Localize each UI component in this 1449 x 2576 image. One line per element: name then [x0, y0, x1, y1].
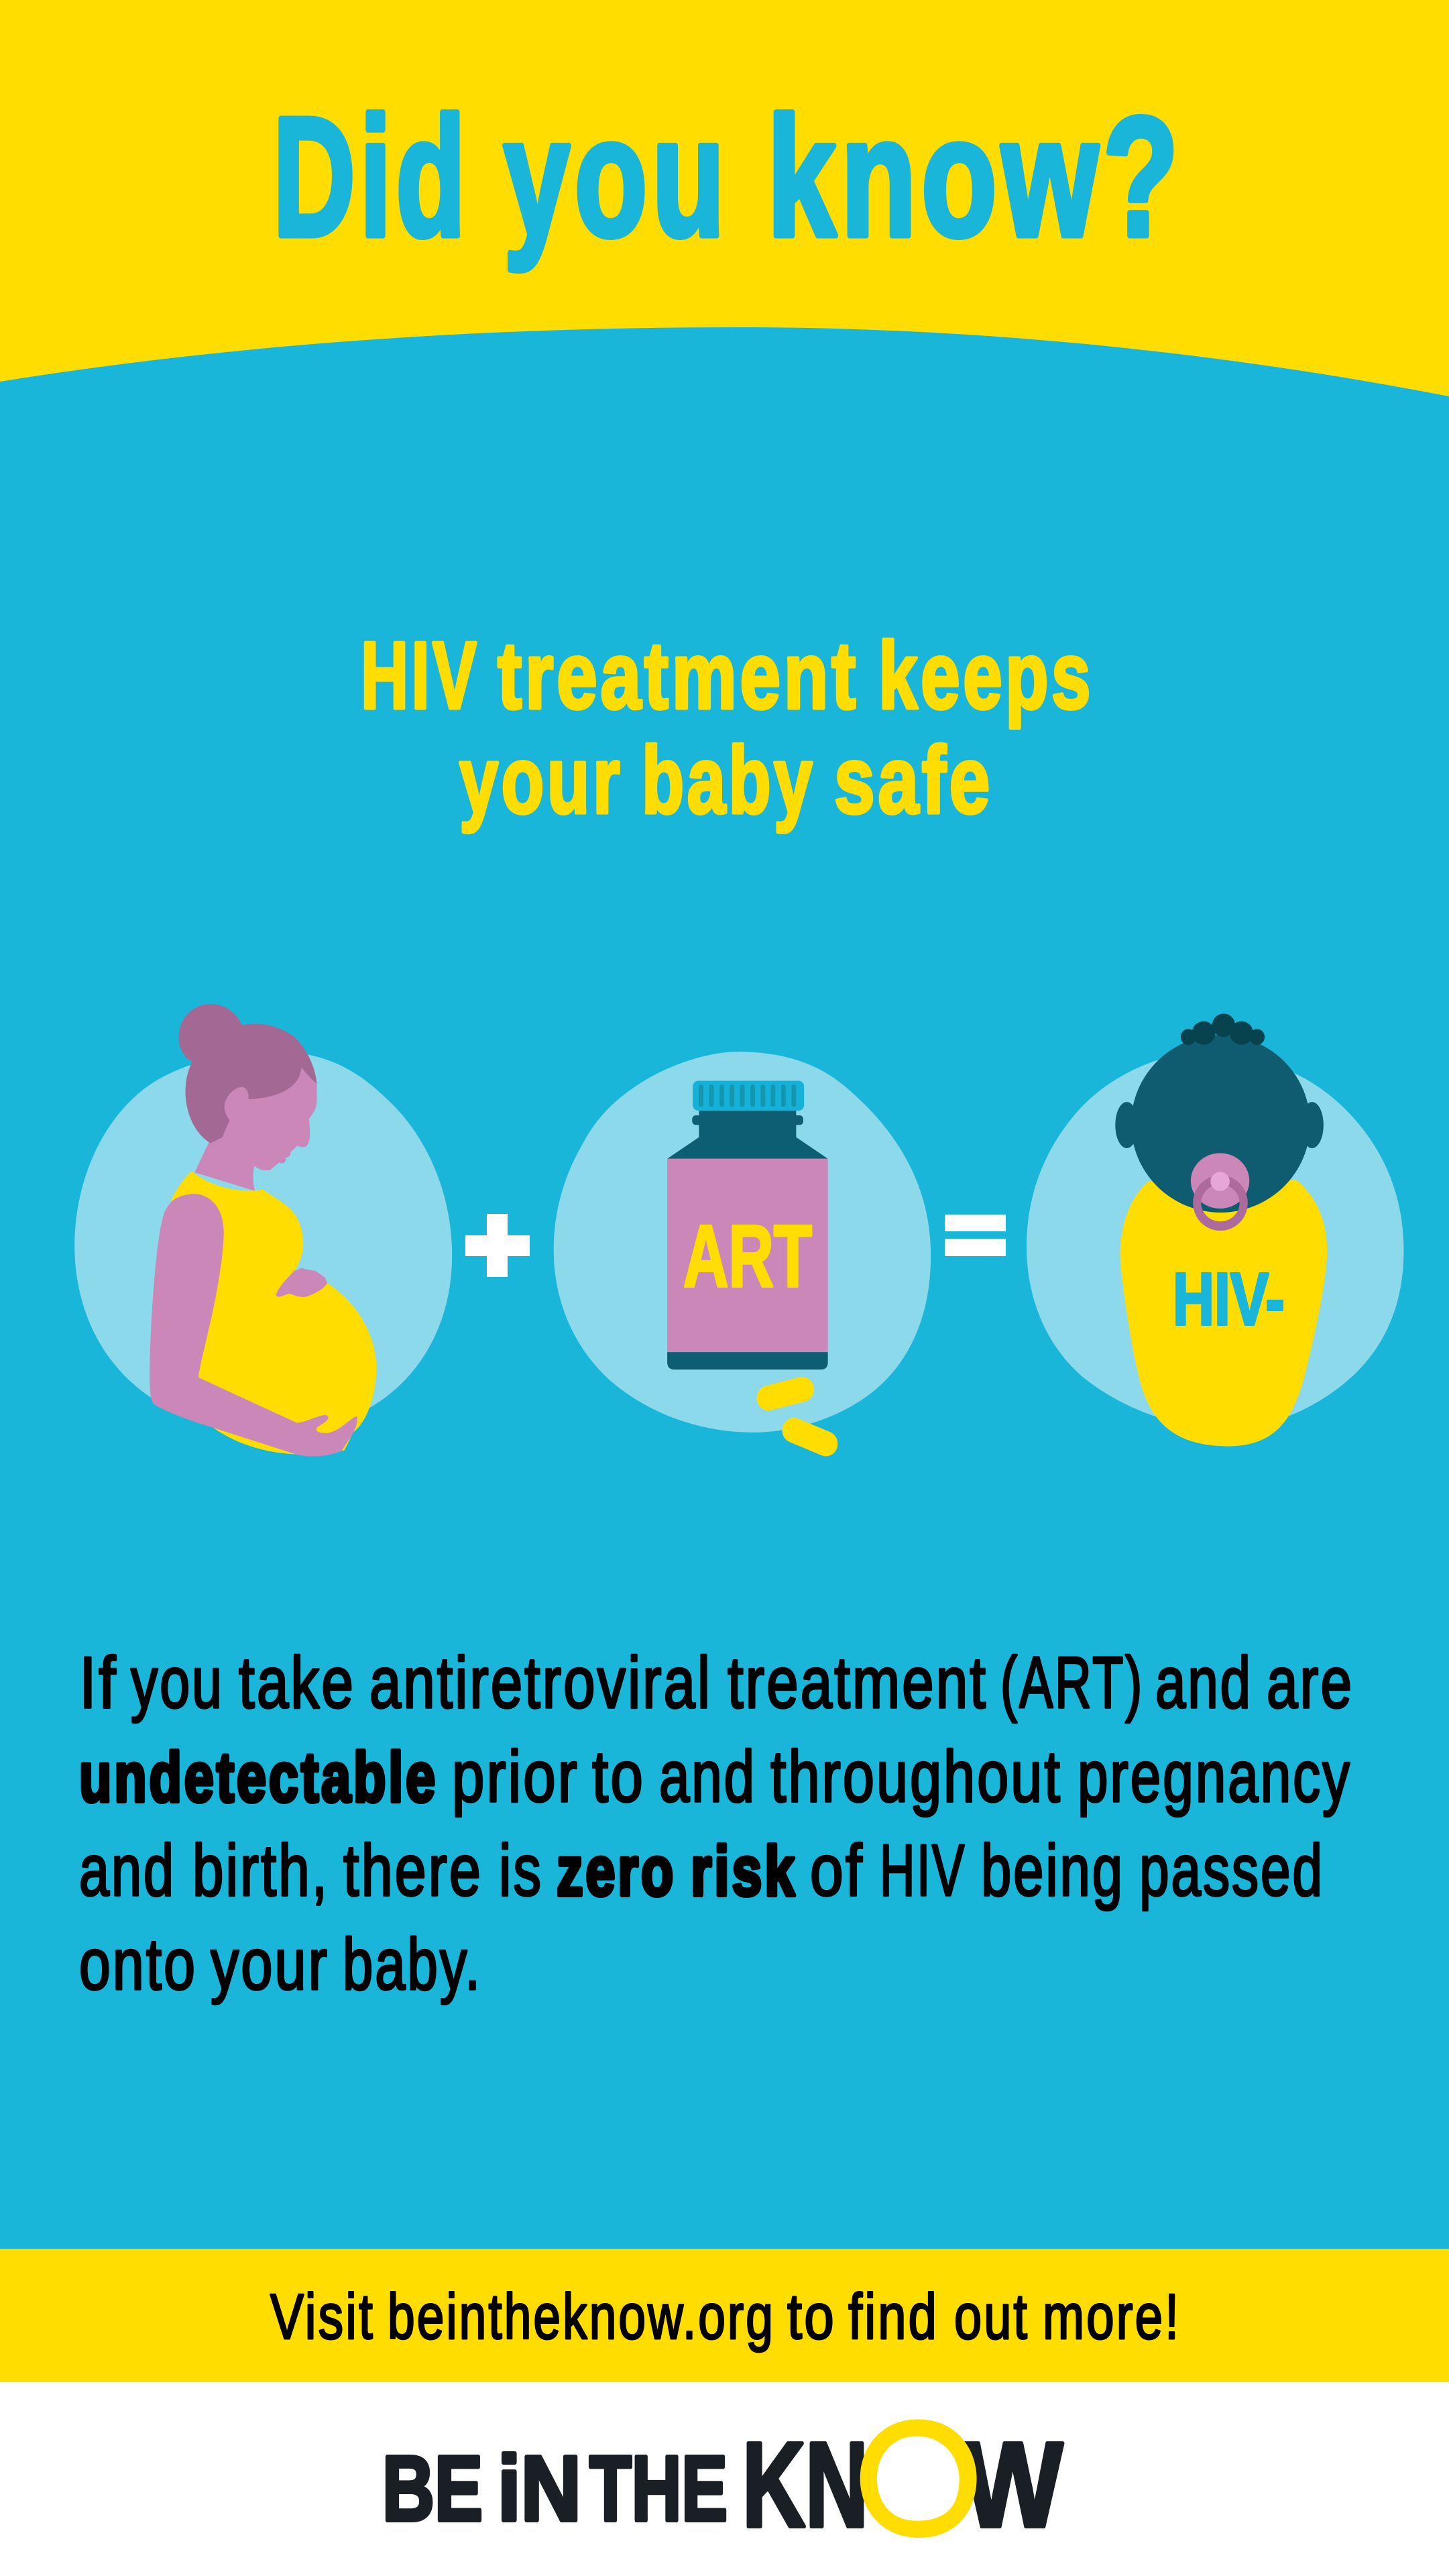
body paragraph: your	[211, 1923, 329, 2005]
top yellow header band	[0, 0, 1449, 396]
pill 2	[794, 1431, 826, 1444]
body paragraph: is	[499, 1830, 543, 1911]
pill 1	[768, 1390, 802, 1398]
body paragraph: birth,	[192, 1830, 329, 1911]
body paragraph: to	[592, 1736, 645, 1817]
logo: Be in the Know: iN	[498, 2437, 581, 2540]
subheading: HIV	[361, 622, 479, 729]
mother lower arm and hand	[150, 1194, 357, 1457]
icon: equals sign	[945, 1215, 1006, 1256]
mother hair	[178, 1004, 316, 1143]
body paragraph: treatment	[728, 1642, 988, 1724]
title	[273, 82, 1183, 272]
footer call-to-action band	[0, 2249, 1449, 2382]
footer text	[270, 2281, 1181, 2353]
body paragraph: take	[239, 1642, 355, 1724]
body paragraph: passed	[1139, 1830, 1324, 1911]
subheading: baby	[642, 727, 815, 834]
mother upper hand	[276, 1268, 327, 1297]
body paragraph: onto	[79, 1923, 197, 2005]
body paragraph: antiretroviral	[369, 1642, 712, 1724]
pacifier	[1191, 1153, 1249, 1226]
logo: Be in the Know: KN	[742, 2418, 868, 2553]
body paragraph: prior	[452, 1736, 579, 1817]
bottle cap	[693, 1081, 804, 1111]
baby hair curls	[1181, 1013, 1265, 1045]
body paragraph: undetectable	[79, 1738, 438, 1817]
bottle label text ART: ART	[683, 1207, 812, 1305]
body paragraph: risk	[691, 1832, 797, 1911]
footer text: beintheknow.org	[388, 2281, 775, 2353]
subheading: treatment	[498, 622, 859, 729]
subheading: safe	[834, 727, 993, 834]
baby background blob	[1027, 1055, 1403, 1429]
logo yellow ring letter	[860, 2419, 977, 2538]
body paragraph: of	[810, 1830, 864, 1911]
logo: Be in the Know: BE	[382, 2437, 483, 2540]
subheading	[361, 622, 1094, 834]
body paragraph: you	[131, 1642, 224, 1724]
mother face, ear and neck	[194, 1068, 316, 1191]
body paragraph: there	[343, 1830, 483, 1911]
body paragraph: throughout	[770, 1736, 1062, 1817]
body paragraph: zero	[557, 1832, 676, 1911]
body paragraph	[79, 1642, 1354, 2005]
title: know?	[767, 82, 1183, 272]
body paragraph: HIV	[880, 1830, 966, 1911]
bottle base	[667, 1352, 828, 1369]
white logo strip	[0, 2382, 1449, 2576]
subheading: keeps	[878, 622, 1094, 729]
subheading: your	[459, 727, 623, 834]
icon: plus sign	[465, 1214, 530, 1277]
body paragraph: and	[659, 1736, 756, 1817]
mother dress	[172, 1172, 376, 1455]
footer text: Visit	[270, 2281, 375, 2353]
footer text: out	[954, 2281, 1029, 2353]
body paragraph: (ART)	[1000, 1642, 1144, 1724]
logo: Be in the Know: W	[963, 2418, 1063, 2553]
illustration: pregnant mother	[74, 1004, 452, 1457]
footer text: to	[787, 2281, 836, 2353]
body paragraph: and	[1155, 1642, 1253, 1724]
footer text: more!	[1043, 2281, 1181, 2353]
illustration: baby	[1027, 1013, 1403, 1446]
title: you	[504, 82, 730, 272]
body paragraph: If	[79, 1642, 118, 1724]
baby ears	[1115, 1102, 1324, 1148]
body paragraph: pregnancy	[1078, 1736, 1352, 1817]
bottle lip	[692, 1115, 803, 1125]
bottle background blob	[554, 1052, 931, 1433]
footer text: find	[848, 2281, 939, 2353]
bottle label	[667, 1159, 828, 1352]
baby head	[1131, 1035, 1310, 1213]
body paragraph: are	[1267, 1642, 1354, 1724]
baby body	[1120, 1180, 1327, 1446]
illustration: ART medicine bottle	[554, 1052, 931, 1444]
title: Did	[273, 82, 470, 272]
body paragraph: being	[981, 1830, 1124, 1911]
logo: Be in the Know: THE	[589, 2437, 728, 2540]
body paragraph: baby.	[343, 1923, 482, 2005]
baby shirt text HIV-: HIV-	[1173, 1258, 1285, 1341]
bottle neck and shoulders	[667, 1109, 828, 1159]
mother background blob	[74, 1052, 452, 1434]
logo: Be in the Know	[382, 2418, 1063, 2553]
body paragraph: and	[79, 1830, 176, 1911]
